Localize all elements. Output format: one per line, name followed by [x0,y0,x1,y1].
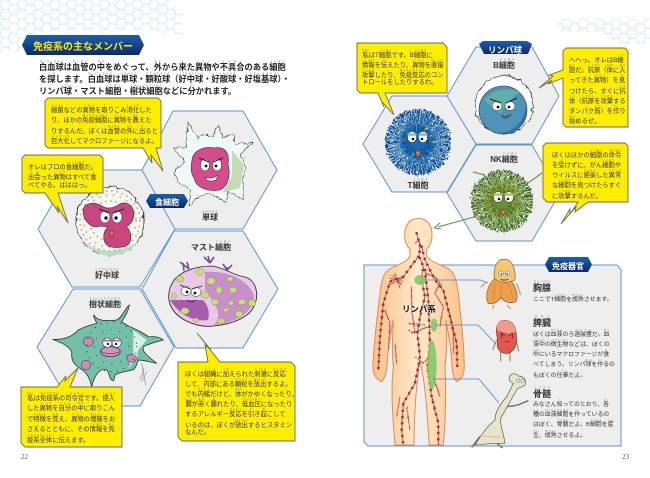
label: lymphatic system: リンパ系けい [402,301,436,314]
intro text: 白血球はっけっきゅう は血管けっかん の中なか をめぐって、外そと から来き た異物いぶつ や不具合ふぐあい のある細胞さいぼう [39,60,286,72]
bubble text: T cell: 私わたし はT細胞さいぼう です。B細胞さいぼう に [362,49,433,59]
speech bubble: monocyte [45,98,163,171]
speech bubble: dendritic cell [21,368,122,447]
label: monocyte: 単球たんきゅう [202,210,218,222]
character: bone marrow [472,374,528,448]
speech bubble: B cell [539,48,628,127]
character: spleen [493,320,519,362]
hexagon: mast cell [142,231,278,348]
bubble text: B cell [569,54,626,125]
hexagon background pattern: right [556,19,650,44]
label: neutrophil: 好中球こうちゅうきゅう [95,268,119,280]
bubble text: neutrophil: べてやる。はははっ。 [28,182,91,189]
page number: 22: 22 [21,453,28,461]
intro text: リンパ球きゅう ・マスト細胞さいぼう ・樹状細胞じゅじょうさいぼう などに分わ かれます。 [39,84,236,96]
organ text: spleen: べてしまう。リンパ球きゅう を作つく るの [533,359,615,368]
speech bubble: T cell [357,43,447,115]
organ text: spleen [533,329,615,379]
leader lines: organs [425,280,499,403]
organ text: bone marrow: はぼく、骨髄こつずい だよ。B細胞さいぼう を産さん [533,419,614,428]
bubble text: B cell: 始はじ めるぜ。 [569,115,600,125]
bubble text: mast cell: 腸ちょう が赤あか く腫は れたり、低血圧ていけつあつ になったり [185,398,292,408]
hexagon: monocyte [142,111,277,229]
bubble text: mast cell: でも内緒ないしょ だけど、体からだ がかゆくなったり、 [185,388,298,398]
bubble text: mast cell: するアレルギー反応はんのう を引ひ き起お こして [185,408,286,418]
bubble text: neutrophil: オレはプロの食細胞しょくさいぼう だ。 [28,161,97,171]
bubble text: NK cell: を受う けずに、がん細胞さいぼう や [552,159,621,169]
cell: neutrophil [76,187,144,256]
bubble text: B cell: 胞ぼう だ。抗原こうげん （体からだ に入はい [569,64,625,74]
hexagon: B cell [447,47,559,144]
hexagon: dendritic cell [37,289,174,406]
bubble text: neutrophil: 出会であ った異物いぶつ はすべて食た [28,171,97,181]
bubble text: B cell: 体たい （抗原こうげん を攻撃こうげき する [569,95,626,105]
arrow: NK cell to body [434,217,474,229]
bubble text: mast cell: いるのは、ぼくが放出ほうしゅつ するヒスタミン [185,419,292,429]
organ text: spleen: 液中えきちゅう の微生物びせいぶつ などは、ぼくの [533,339,610,348]
label: B cell: B細胞さいぼう [493,58,515,70]
organ text: bone marrow: みなさん知し ってのとおり、各かく [533,399,609,408]
organ heading: thymus: 胸腺きょうせん [533,280,551,293]
organ text: spleen: ぼくは血液けつえき のろ過装置かそうち だ。血けつ [533,329,609,338]
label: NK cell: NK細胞さいぼう [490,152,518,164]
hexagon: NK cell [447,145,560,241]
bubble text: NK cell: ぼくはほかの細胞さいぼう の命令めいれい [552,149,621,159]
organ heading: spleen: 脾臓ひぞう [533,315,551,328]
intro text [39,60,290,96]
bubble text: neutrophil [28,161,97,189]
badge shape: phagocytes [146,194,188,208]
hexagon: T cell [363,96,476,192]
bubble text: B cell: へへっ。オレはB細さい [569,54,624,64]
bubble text: mast cell: ぼくは組織そしき に加くわ えられた刺激しげき に反応はんのう [185,368,286,378]
bubble text: NK cell: ウイルスに感染かんせん した異常いじょう [552,169,621,179]
organ text: spleen: 中なか にいるマクロファージが食た [533,349,609,358]
cell: B cell [475,76,533,134]
speech bubble: neutrophil [22,155,103,223]
badge label: immune organs: 免疫器官めんえききかん [552,259,584,271]
cell: mast cell [169,256,257,326]
bubble text: dendritic cell: 私わたし は免疫系めんえきけい の司令官しれいかん です。侵入しんにゅう [27,392,115,402]
intro text: を探さが します。白血球はっけっきゅう は単球たんきゅう ・顆粒球かりゅうきゅう （好中球こうちゅうきゅう ・好酸球こうさんきゅう ・好塩基球こうえんききゅう ）・ [39,72,290,84]
bubble text: mast cell: して、内部ないぶ にある顆粒かりゅう を放出ほうしゅつ するよ。 [185,378,292,388]
organ text: spleen: もぼくの仕事しごと だよ。 [533,370,586,379]
organ text: bone marrow [533,399,614,439]
badge label: lymphocytes: リンパ球きゅう [488,42,522,55]
bubble text: T cell [362,49,444,86]
title banner shape [22,35,144,55]
page number: 23: 23 [622,453,629,461]
bubble text: monocyte: りするんだ。ぼくは血管けっかん の外そと に出で ると [51,124,158,134]
bubble text: dendritic cell: した異物いぶつ を自分じぶん の中なか に取と りこん [27,402,115,412]
bubble text: B cell: タンパク質しつ ）を作つく り [569,105,626,115]
cell: T cell [392,116,444,168]
bubble text: T cell: 情報じょうほう を伝つた えたり、異物いぶつ を直接ちょくせつ [362,59,444,69]
bubble text: mast cell: なんだ。 [185,429,210,436]
label: T cell: T細胞さいぼう [408,178,428,190]
bubble text: dendritic cell: さえるとともに、その情報じょうほう を免めん [27,423,115,433]
bubble text: dendritic cell [27,392,115,444]
badge label: phagocytes: 食細胞しょくさいぼう [155,195,179,207]
bubble text: NK cell [552,149,621,200]
cell: dendritic cell [53,305,163,387]
character: thymus [481,259,521,309]
panel: immune organs [364,265,621,446]
bubble text: mast cell [185,368,298,436]
bubble text: T cell: 攻撃こうげき したり、免疫反応めんえきはんのう のコン [362,69,444,79]
human body with lymphatic system [373,218,464,445]
cell: NK cell [473,172,542,224]
organ text: bone marrow: 生せい 、成熟せいじゅく させるよ。 [533,430,586,439]
organ heading: bone marrow: 骨髄こつずい [533,386,551,399]
label: mast cell: マスト細胞さいぼう [191,240,231,252]
bubble text: NK cell: な細胞さいぼう を見み つけたらすぐ [552,179,621,189]
bubble text: monocyte [51,104,158,144]
title: 免疫系めんえきけい の主おも なメンバー [33,39,133,53]
bubble text: dendritic cell: 疫系全体えきけいぜんたい に伝つた えます。 [27,434,89,444]
bubble text: B cell: ってきた異物いぶつ ）を見み [569,74,625,84]
organ text: thymus: ここでT細胞さいぼう を成熟せいじゅく させます。 [533,294,613,303]
organ text: bone marrow: 種しゅ の血液細胞けつえきさいぼう を作つく っているの [533,409,609,418]
badge shape: immune organs [545,257,592,272]
bubble text: T cell: トロールをしたりするわ。 [362,79,438,86]
label: dendritic cell: 樹状細胞じゅじょうさいぼう [89,297,121,309]
hexagon background pattern: left [0,0,182,52]
badge shape: lymphocytes [479,41,532,54]
bubble text: B cell: つけたら、すぐに抗こう [569,85,626,95]
hexagon: neutrophil [38,170,175,287]
speech bubble: mast cell [178,333,295,441]
cell: monocyte [174,122,253,206]
bubble text: monocyte: 細菌さいきん などの異物いぶつ を取と りこみ消化しょうか した [51,104,152,114]
speech bubble: NK cell [543,143,628,224]
bubble text: dendritic cell: で特徴とくちょう を覚おぼ え、異物いぶつ の増殖ぞうしょく をお [27,413,115,423]
bubble text: monocyte: 巨大化きょだいか してマクロファージになるよ。 [51,134,158,144]
bubble text: monocyte: り、ほかの免疫細胞めんえきさいぼう に異物いぶつ を教おし えた [51,114,152,124]
bubble text: NK cell: に攻撃こうげき するんだ。 [552,190,602,200]
